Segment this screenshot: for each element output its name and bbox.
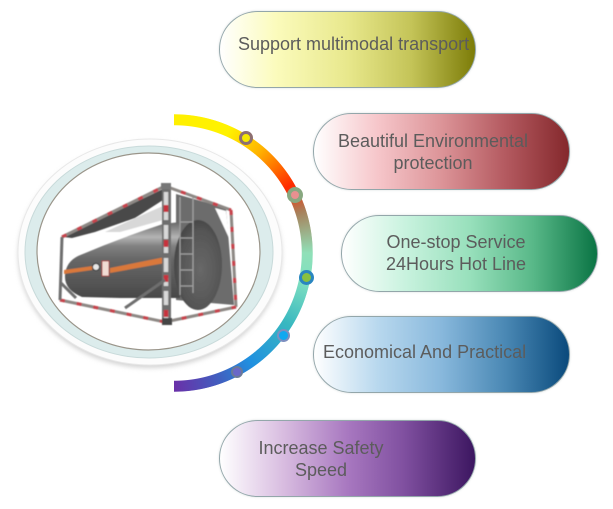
white window of end frame <box>215 208 229 238</box>
tank container <box>60 183 236 325</box>
pill text: Support multimodal transport <box>238 34 469 54</box>
arc node: blue <box>277 329 290 342</box>
pill: beautiful environmental protection <box>313 113 570 190</box>
frame corner post <box>162 186 171 323</box>
arc node: pink <box>287 187 303 203</box>
pill: economical and practical <box>313 316 570 393</box>
orange stripe <box>64 266 93 274</box>
hazard label <box>92 261 109 276</box>
arc node: green <box>299 270 314 285</box>
tank dome <box>174 220 222 310</box>
circular photo frame with tank container <box>16 138 284 370</box>
left frame post and struts <box>60 237 165 308</box>
pill text: Beautiful Environmental protection <box>338 131 528 173</box>
frame rails <box>60 186 236 322</box>
pill: one-stop service <box>341 215 598 292</box>
cylindrical tank body <box>65 222 180 298</box>
pill text: Increase Safety Speed <box>258 438 384 480</box>
roof panel <box>63 189 163 238</box>
inner photo ellipse <box>37 153 260 350</box>
ladder <box>180 197 193 295</box>
teal ring <box>25 146 273 358</box>
arc node: yellow <box>239 131 253 145</box>
white gap under roof <box>105 206 163 232</box>
pill: support multimodal transport <box>219 11 476 88</box>
rainbow arc <box>174 114 313 392</box>
pill text: Economical And Practical <box>323 342 526 362</box>
end frame plate <box>176 194 234 305</box>
pill: increase safety speed <box>219 420 476 497</box>
outer white ring <box>18 139 282 368</box>
arc node: violet <box>231 366 243 378</box>
pill text: One-stop Service 24Hours Hot Line <box>386 232 526 274</box>
